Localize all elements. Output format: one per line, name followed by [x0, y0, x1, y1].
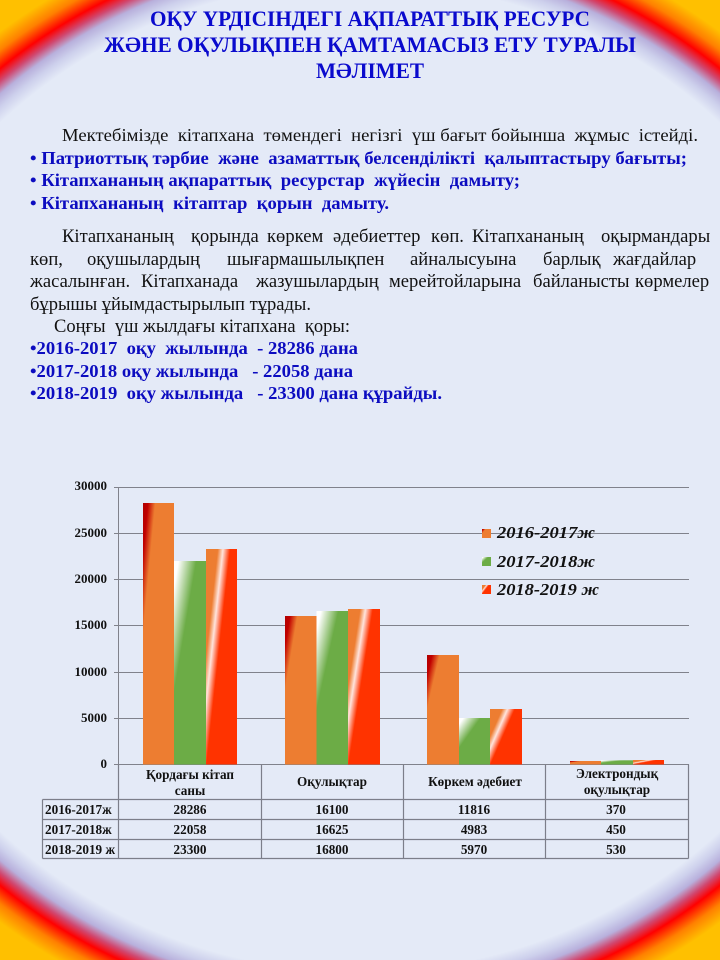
title [104, 6, 636, 83]
data table [42, 764, 688, 858]
y-axis labels: 30000 [74, 478, 107, 493]
legend: 2018-2019 ж [496, 580, 599, 599]
title: ОҚУ ҮРДІСІНДЕГІ АҚПАРАТТЫҚ РЕСУРС [150, 6, 590, 31]
table values: 16625 [316, 822, 349, 837]
y-axis labels: 15000 [74, 617, 107, 632]
table values: 23300 [174, 842, 207, 857]
y-axis labels: 10000 [74, 664, 107, 679]
title: ЖӘНЕ ОҚУЛЫҚПЕН ҚАМТАМАСЫЗ ЕТУ ТУРАЛЫ [104, 32, 636, 57]
paragraph about the library: оқырмандары [601, 226, 711, 247]
intro text block [30, 125, 698, 213]
paragraph about the library: айналысуына [410, 249, 516, 270]
paragraph about the library: көрмелер [635, 271, 709, 292]
directions bullet list: • Патриоттық тәрбие және азаматтық белсенділікті қалыптастыру бағыты; [30, 148, 687, 168]
bars: Қордағы кітап саны [143, 503, 237, 764]
legend: 2017-2018ж [496, 552, 595, 571]
y-axis labels: 5000 [81, 710, 107, 725]
table row labels [45, 802, 115, 857]
paragraph about the library: қорында [191, 226, 259, 247]
table column headers: саны [175, 783, 205, 798]
legend: 2016-2017ж [496, 523, 595, 542]
table row labels: 2016-2017ж [45, 802, 112, 817]
table values: 4983 [461, 822, 488, 837]
table column headers: оқулықтар [584, 782, 650, 797]
bar chart [42, 478, 689, 858]
legend [482, 523, 599, 599]
table values: 22058 [174, 822, 207, 837]
paragraph about the library: көп, [30, 249, 63, 270]
paragraph about the library: оқушылардың [87, 249, 200, 270]
paragraph about the library: байланысты [533, 271, 630, 292]
table values: 5970 [461, 842, 488, 857]
paragraph about the library: Кітапхананың [62, 226, 174, 247]
table row labels: 2018-2019 ж [45, 842, 115, 857]
paragraph about the library: барлық [543, 249, 602, 270]
paragraph about the library: әдебиеттер [333, 226, 420, 247]
table values: 450 [606, 822, 626, 837]
table column headers: Электрондық [576, 766, 659, 781]
paragraph about the library [29, 226, 711, 337]
bars: Оқулықтар [285, 609, 380, 764]
directions bullet list: • Кітапхананың ақпараттық ресурстар жүйесін дамыту; [30, 170, 520, 190]
table column headers: Қордағы кітап [146, 767, 234, 782]
y-axis labels: 25000 [74, 525, 107, 540]
fund by year bullet list: •2016-2017 оқу жылында - 28286 дана [30, 338, 358, 358]
paragraph about the library: Соңғы үш жылдағы кітапхана қоры: [54, 316, 350, 337]
title: МӘЛІМЕТ [316, 58, 424, 83]
table row labels: 2017-2018ж [45, 822, 112, 837]
table values: 16100 [316, 802, 349, 817]
bars: Электрондық оқулықтар [570, 760, 664, 764]
gridlines and axis [114, 487, 689, 858]
paragraph about the library: мерейтойларына [389, 271, 521, 292]
table values: 11816 [458, 802, 491, 817]
fund by year bullet list [30, 338, 442, 403]
paragraph about the library: Кітапхананың [472, 226, 584, 247]
paragraph about the library: жасалынған. [29, 271, 130, 292]
paragraph about the library: көркем [267, 226, 323, 247]
table values: 530 [606, 842, 626, 857]
y-axis labels: 20000 [74, 571, 107, 586]
y-axis labels [74, 478, 107, 771]
table values [174, 802, 626, 857]
table column headers: Оқулықтар [297, 774, 367, 789]
table column headers: Көркем әдебиет [428, 774, 522, 789]
paragraph about the library: Кітапханада [141, 271, 238, 292]
table values: 28286 [174, 802, 207, 817]
fund by year bullet list: •2017-2018 оқу жылында - 22058 дана [30, 361, 353, 381]
directions bullet list [30, 148, 687, 213]
paragraph about the library: жазушылардың [255, 271, 379, 292]
table values: 16800 [316, 842, 349, 857]
fund by year bullet list: •2018-2019 оқу жылында - 23300 дана құрайды. [30, 383, 442, 403]
table values: 370 [606, 802, 626, 817]
paragraph about the library: көп. [431, 226, 464, 247]
table column headers [146, 766, 659, 798]
paragraph about the library: шығармашылықпен [227, 249, 384, 270]
intro text block: Мектебімізде кітапхана төмендегі негізгі үш бағыт бойынша жұмыс істейді. [62, 125, 698, 145]
directions bullet list: • Кітапхананың кітаптар қорын дамыту. [30, 193, 389, 213]
y-axis labels: 0 [100, 756, 107, 771]
paragraph about the library: бұрышы ұйымдастырылып тұрады. [30, 294, 311, 315]
paragraph about the library: жағдайлар [612, 249, 696, 270]
bars: Көркем әдебиет [427, 655, 522, 764]
